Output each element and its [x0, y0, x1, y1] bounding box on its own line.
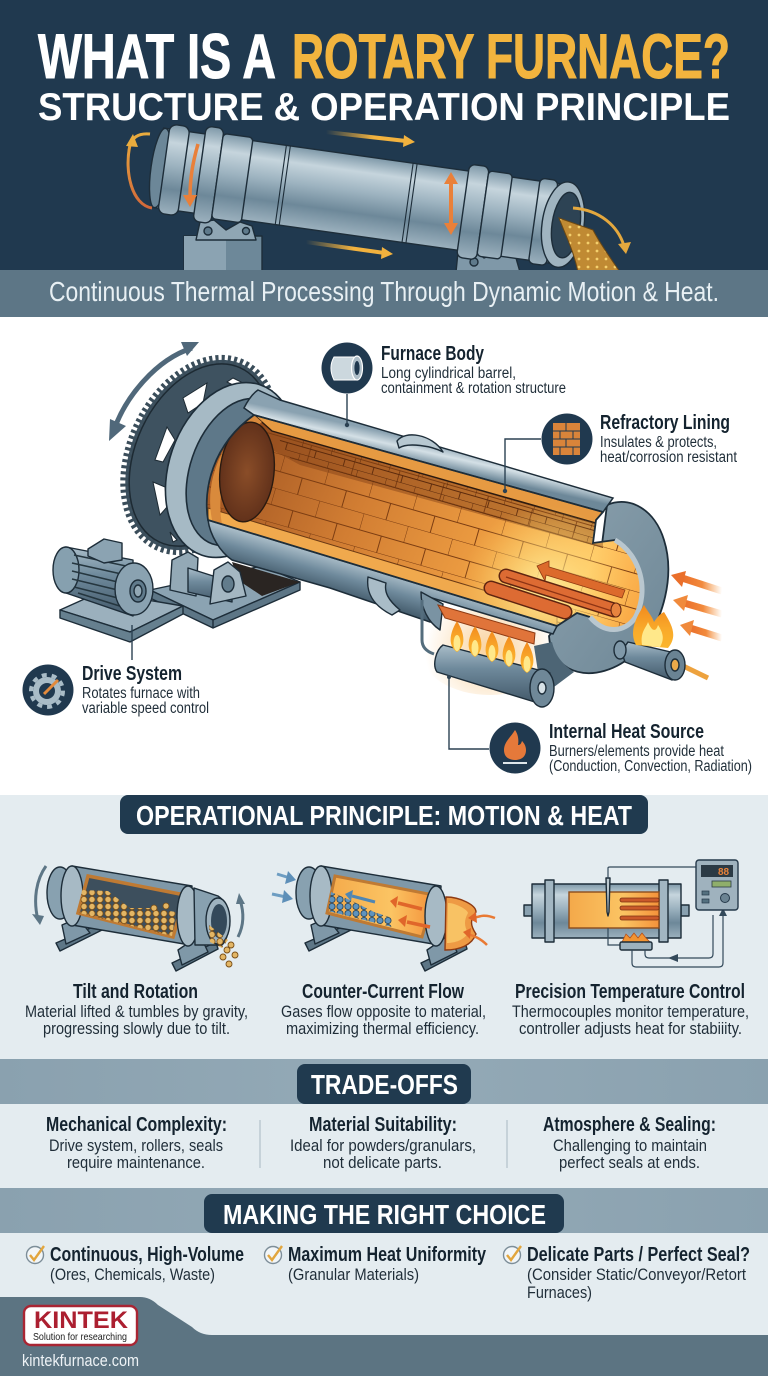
material discharge: [559, 218, 620, 272]
flow arrow inside: [537, 561, 625, 598]
right support: [456, 250, 520, 272]
callout: furnace body: Furnace Body: [381, 343, 485, 365]
rotation arrow orange down: [183, 144, 198, 207]
column: mechanical complexity: require maintenance.: [67, 1153, 205, 1172]
callout: furnace body: containment & rotation structure: [381, 380, 566, 397]
logo: [24, 1306, 137, 1345]
illustration: precision temperature control: [524, 860, 738, 967]
choice: delicate parts: Furnaces): [527, 1283, 592, 1302]
base: [60, 562, 300, 642]
icon: check: [504, 1246, 521, 1264]
icon: check: [264, 1246, 282, 1264]
heading pill: [297, 1064, 471, 1104]
callout: internal heat source: Burners/elements provide heat: [549, 743, 725, 760]
website: kintekfurnace.com: [22, 1351, 139, 1370]
illustration: counter-current flow: [272, 866, 495, 971]
choice: maximum heat uniformity: (Granular Materials): [288, 1265, 419, 1284]
choice: maximum heat uniformity: [264, 1244, 487, 1284]
callout: drive system: variable speed control: [82, 700, 209, 717]
rotation arrow: [109, 342, 199, 441]
icon: flame: [503, 730, 527, 764]
column: atmosphere and sealing: [543, 1114, 716, 1172]
heading pill: MAKING THE RIGHT CHOICE: [223, 1199, 546, 1230]
header illustration: rotary furnace: [126, 119, 631, 275]
text: precision temperature control: [512, 980, 749, 1038]
heading pill: OPERATIONAL PRINCIPLE: MOTION & HEAT: [136, 800, 632, 831]
band: [0, 1188, 768, 1233]
callout: internal heat source: [447, 675, 752, 775]
shell ring: [168, 385, 306, 559]
text: precision temperature control: controller adjusts heat for stabiiity.: [519, 1019, 742, 1038]
column: mechanical complexity: Drive system, rollers, seals: [49, 1136, 223, 1155]
section: making the right choice: [0, 1188, 768, 1302]
main furnace diagram: [22, 336, 752, 775]
temperature controller: [696, 860, 738, 910]
callout: internal heat source: Internal Heat Source: [549, 721, 704, 743]
callout: furnace body: [322, 342, 566, 427]
column: atmosphere and sealing: perfect seals at ends.: [559, 1153, 700, 1172]
gear windows: [153, 378, 243, 542]
icon: bricks: [553, 423, 580, 455]
band: [0, 1059, 768, 1104]
footer: [0, 1297, 768, 1376]
temperature controller: 88: [718, 867, 730, 878]
heading pill: TRADE-OFFS: [311, 1069, 458, 1100]
ring gear: [96, 336, 304, 574]
rotation arrow orange double: [444, 172, 458, 235]
collar on shell: [397, 435, 443, 452]
hole rim: [590, 540, 642, 630]
callout: furnace body: Long cylindrical barrel,: [381, 365, 516, 382]
column: material suitability: [290, 1114, 476, 1172]
choice: continuous high-volume: [26, 1244, 244, 1284]
bottom shell: [208, 520, 557, 634]
right burner: [614, 605, 708, 680]
column: atmosphere and sealing: Challenging to maintain: [553, 1136, 707, 1155]
refractory interior: [208, 416, 640, 627]
drive motor: [53, 539, 153, 616]
left support: [184, 220, 262, 272]
callout: drive system: Drive System: [82, 663, 182, 685]
text: counter-current flow: Counter-Current Flow: [302, 980, 464, 1003]
heating rods: [491, 576, 621, 617]
text: tilt and rotation: Tilt and Rotation: [73, 980, 198, 1003]
rotating tube: [144, 119, 591, 275]
heading pill: [120, 795, 648, 834]
lower burner cavity: [421, 592, 535, 654]
motion arrow top: [326, 132, 415, 147]
text: counter-current flow: [281, 980, 486, 1038]
icon: check: [26, 1246, 44, 1264]
end cap: [549, 502, 668, 673]
lower background: [0, 795, 768, 1376]
incoming heat arrows: [671, 571, 722, 638]
choice: delicate parts: [504, 1244, 750, 1302]
text: tilt and rotation: Material lifted & tumbles by gravity,: [25, 1002, 248, 1021]
top shell: [244, 390, 613, 512]
discharge arrow: [573, 208, 631, 254]
subtitle band: [0, 270, 768, 317]
callout: refractory lining: Refractory Lining: [600, 412, 730, 434]
logo: Solution for researching: [33, 1331, 127, 1343]
logo: KINTEK: [34, 1307, 129, 1334]
title line 1: [38, 22, 730, 92]
column: material suitability: not delicate parts.: [323, 1153, 442, 1172]
text: counter-current flow: Gases flow opposite to material,: [281, 1002, 486, 1021]
outer flange: [143, 365, 319, 575]
choice: continuous high-volume: (Ores, Chemicals, Waste): [50, 1265, 215, 1284]
callout: drive system: Rotates furnace with: [82, 685, 200, 702]
column: material suitability: Ideal for powders/granulars,: [290, 1136, 476, 1155]
text: counter-current flow: maximizing thermal efficiency.: [286, 1019, 479, 1038]
text: tilt and rotation: [25, 980, 248, 1038]
column: atmosphere and sealing: Atmosphere & Sealing:: [543, 1114, 716, 1136]
column: material suitability: Material Suitability:: [309, 1114, 457, 1136]
callout: drive system: [22, 625, 209, 717]
callout: refractory lining: Insulates & protects,: [600, 434, 717, 451]
icon: gear: [31, 675, 63, 707]
text: tilt and rotation: progressing slowly due to tilt.: [43, 1019, 230, 1038]
cut outline: [207, 415, 615, 626]
title line 1: WHAT IS A: [38, 22, 276, 92]
rotation arrow left: [126, 134, 152, 208]
burner manifold: [435, 645, 554, 707]
header panel: [0, 0, 768, 275]
choice: maximum heat uniformity: Maximum Heat Uniformity: [288, 1244, 487, 1266]
burner flames: [451, 621, 533, 673]
icon: cylinder: [331, 356, 362, 380]
callout: refractory lining: heat/corrosion resistant: [600, 449, 738, 466]
heading pill: [204, 1194, 564, 1233]
column: mechanical complexity: Mechanical Complexity:: [46, 1114, 227, 1136]
section: trade-offs: [0, 1059, 768, 1172]
callout: refractory lining: [503, 412, 738, 493]
illustration: tilt and rotation: [32, 866, 245, 971]
motion arrow bottom: [306, 242, 393, 259]
column: mechanical complexity: [46, 1114, 227, 1172]
shadow wedge under shell end: [534, 642, 574, 690]
section: operational principle: [25, 795, 749, 1038]
title line 2: STRUCTURE & OPERATION PRINCIPLE: [38, 86, 730, 129]
under-burner glow: [420, 605, 560, 695]
bottom collar: [368, 577, 400, 615]
choice: continuous high-volume: Continuous, High-Volume: [50, 1244, 244, 1266]
rollers: [170, 552, 246, 604]
